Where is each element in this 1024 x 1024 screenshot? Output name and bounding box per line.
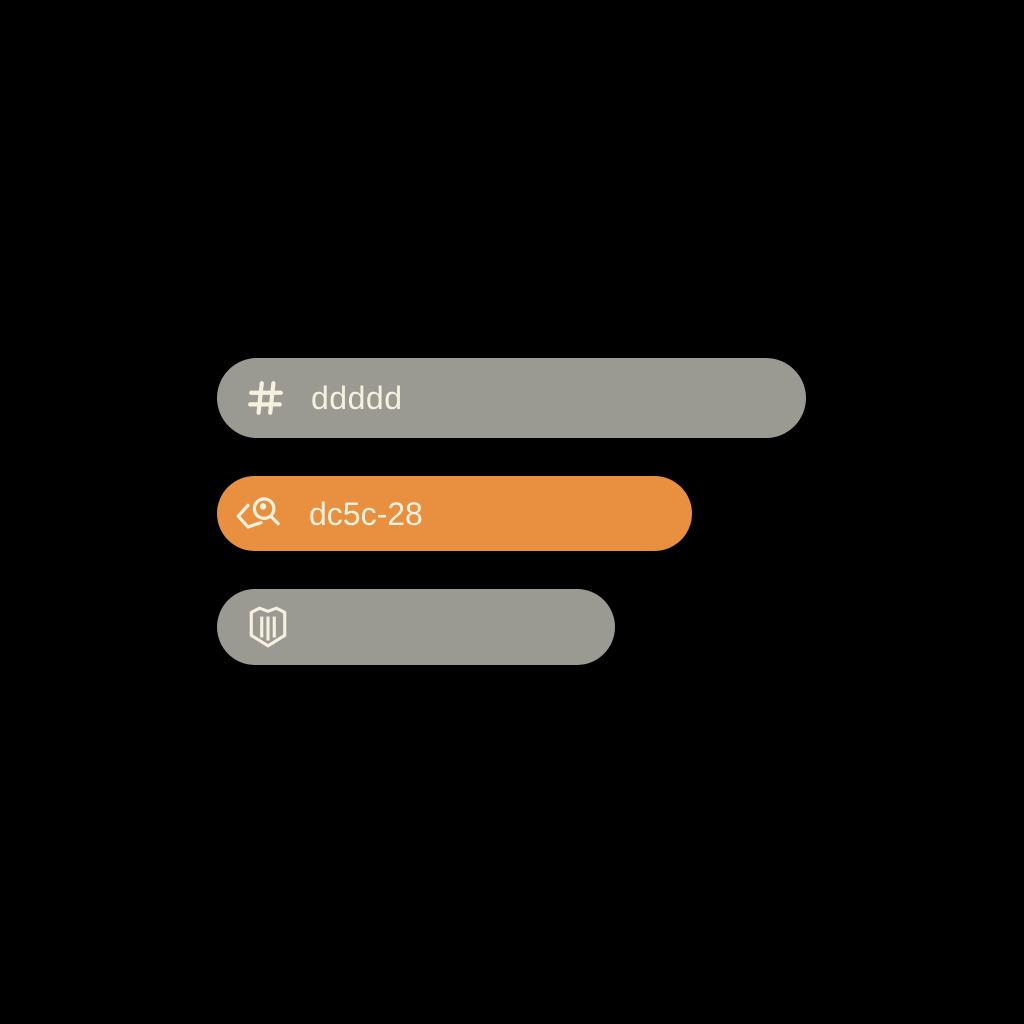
label: ddddd: ddddd [311, 380, 402, 416]
bar: ddddd [217, 358, 806, 438]
icon: tag with magnifier [236, 497, 280, 529]
bar: dc5c-28 [217, 476, 692, 551]
icon: hash [248, 381, 283, 415]
label: dc5c-28: dc5c-28 [309, 496, 423, 532]
bar: empty [217, 589, 615, 665]
icon: shield [250, 606, 286, 648]
